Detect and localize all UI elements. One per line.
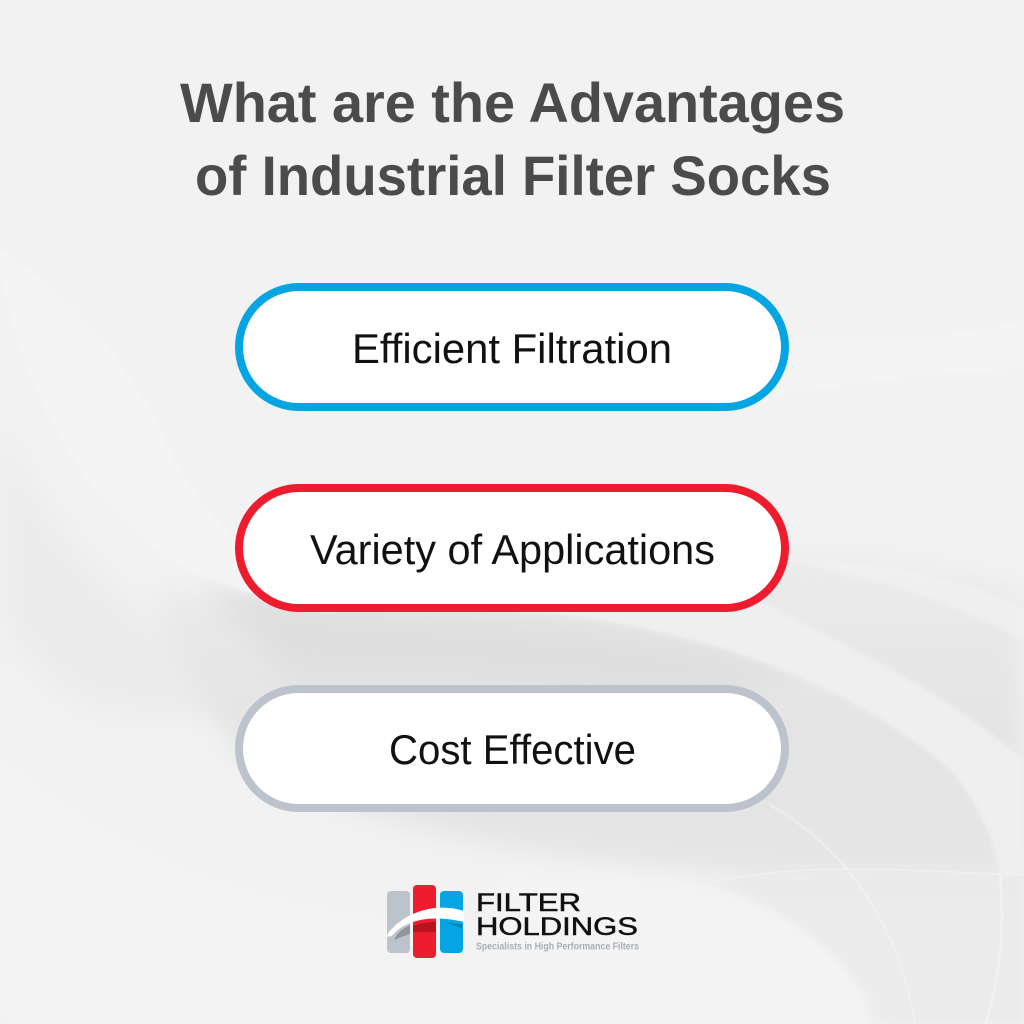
pill: Efficient Filtration: Efficient Filtration	[352, 325, 672, 372]
pill: Cost Effective	[239, 689, 785, 808]
lower right light sweep	[700, 875, 1024, 1024]
icon: three filter bars with swoosh	[386, 885, 464, 958]
dark central band	[150, 557, 1024, 880]
wordmark: FILTER	[476, 889, 581, 917]
pill: Variety of Applications: Variety of Applications	[310, 526, 715, 573]
pill: Cost Effective: Cost Effective	[389, 726, 636, 773]
upper left light sweep	[0, 250, 340, 612]
logo: Filter Holdings	[386, 885, 639, 958]
title: of Industrial Filter Socks	[195, 144, 831, 207]
mid left soft tone	[0, 420, 290, 718]
lower left light sweep	[0, 640, 520, 1024]
wordmark	[476, 889, 638, 941]
pill: Variety of Applications	[239, 488, 785, 608]
title: What are the Advantages	[180, 71, 845, 134]
right swoosh over dark	[500, 596, 1024, 880]
title	[180, 71, 845, 207]
tagline: Specialists in High Performance Filters	[476, 940, 639, 952]
wordmark: HOLDINGS	[476, 913, 638, 941]
pill: Efficient Filtration	[239, 287, 785, 407]
